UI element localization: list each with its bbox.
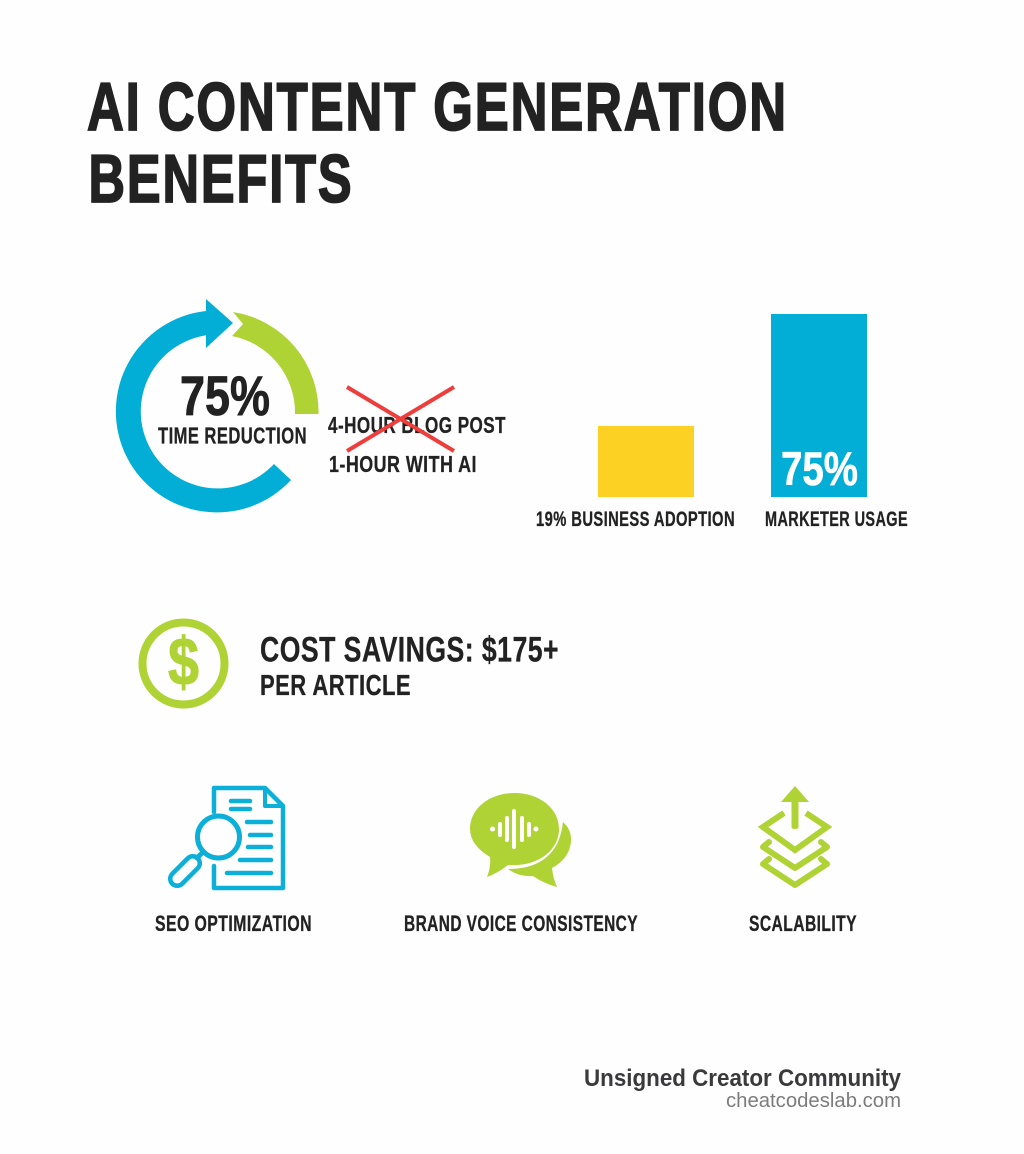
bar: business adoption <box>598 426 694 497</box>
stat: 75% time reduction: TIME REDUCTION <box>158 422 307 448</box>
bar chart: adoption and usage <box>536 314 908 531</box>
footer credit <box>584 1065 902 1112</box>
footer credit: cheatcodeslab.com <box>726 1090 901 1112</box>
panel: scalability <box>749 786 857 936</box>
label: scalability: SCALABILITY <box>749 911 857 936</box>
title: AI CONTENT GENERATION <box>87 69 788 145</box>
text: cost savings <box>260 630 559 702</box>
text: cost savings: PER ARTICLE <box>260 670 411 702</box>
stat: 75% time reduction: 75% <box>180 364 270 427</box>
icon: dollar coin: $ <box>168 624 199 700</box>
panel: cost savings <box>142 622 559 704</box>
label: brand voice consistency: BRAND VOICE CONSISTENCY <box>404 911 638 936</box>
comparison: blog post time: 1-HOUR WITH AI <box>329 451 477 477</box>
stat: 75% time reduction <box>158 364 307 448</box>
icon: dollar coin <box>142 622 224 704</box>
text: cost savings: COST SAVINGS: $175+ <box>260 630 559 670</box>
icon: speech bubbles with waveform <box>470 793 571 887</box>
label: marketer usage: MARKETER USAGE <box>765 507 908 531</box>
bar value: 75% <box>781 442 858 495</box>
label: business adoption: 19% BUSINESS ADOPTION <box>536 507 735 531</box>
chart: time reduction ring <box>116 299 319 512</box>
panel: time reduction <box>116 299 506 512</box>
title: BENEFITS <box>88 141 354 217</box>
comparison: blog post time: 4-HOUR BLOG POST <box>328 412 506 438</box>
icon: layers with up arrow <box>763 786 827 885</box>
bar: marketer usage <box>771 314 867 497</box>
panel: brand voice consistency <box>404 793 638 936</box>
comparison: blog post time <box>328 387 506 477</box>
panel: seo optimization <box>155 788 312 936</box>
title <box>87 69 788 217</box>
label: seo optimization: SEO OPTIMIZATION <box>155 911 312 936</box>
icon: document with magnifier <box>167 788 283 889</box>
footer credit: Unsigned Creator Community <box>584 1065 902 1092</box>
